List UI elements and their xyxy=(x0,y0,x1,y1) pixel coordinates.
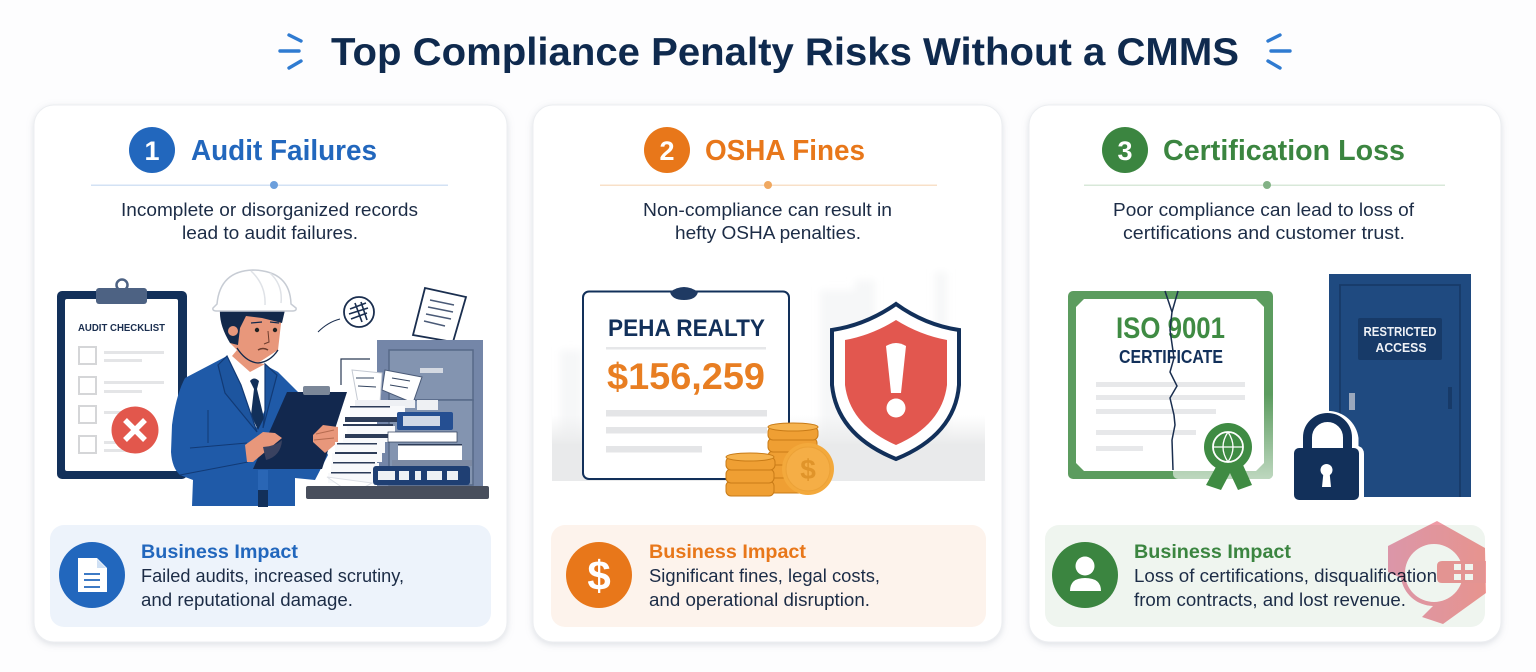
impact text 2 xyxy=(649,542,880,610)
description 3: certifications and customer trust. xyxy=(1123,222,1405,243)
impact text 3: Business Impact xyxy=(1134,542,1292,563)
number badge 2 xyxy=(644,127,690,173)
title text: Top Compliance Penalty Risks Without a CMMS xyxy=(331,31,1239,74)
impact text 3: from contracts, and lost revenue. xyxy=(1134,590,1406,610)
impact text 3: Loss of certifications, disqualification xyxy=(1134,566,1437,586)
impact text 1: Business Impact xyxy=(141,542,299,563)
description 2: hefty OSHA penalties. xyxy=(675,222,861,243)
padlock xyxy=(1292,411,1364,500)
panel: certification loss xyxy=(1029,105,1501,642)
impact text 3 xyxy=(1134,542,1437,610)
warning shield xyxy=(832,304,959,459)
impact text 2: Business Impact xyxy=(649,542,807,563)
gold coin stacks: $ xyxy=(800,454,816,485)
panel: audit failures xyxy=(34,105,507,642)
impact text 1: Failed audits, increased scrutiny, xyxy=(141,566,404,586)
description 3: Poor compliance can lead to loss of xyxy=(1113,199,1415,220)
number badge 1 xyxy=(129,127,175,173)
divider 3 xyxy=(1084,181,1445,189)
icon: person xyxy=(1052,542,1118,608)
watermark badge xyxy=(1388,521,1486,624)
cracked ISO certificate: CERTIFICATE xyxy=(1119,347,1223,367)
impact text 2: and operational disruption. xyxy=(649,590,870,610)
card background xyxy=(1029,105,1501,642)
icon: left sparkle xyxy=(280,35,301,68)
filing cabinet xyxy=(377,340,483,487)
restricted access door: ACCESS xyxy=(1376,341,1426,355)
divider 2 xyxy=(600,181,937,189)
pile of papers and binders xyxy=(327,359,472,494)
number badge 1: 1 xyxy=(144,136,160,166)
business impact box 3 xyxy=(1045,525,1485,627)
illustration: broken certificate and locked door xyxy=(1068,274,1471,500)
description 1: lead to audit failures. xyxy=(182,222,358,243)
icon: dollar xyxy=(566,542,632,608)
business impact box 1 xyxy=(50,525,491,627)
description 3 xyxy=(1113,199,1415,243)
penalty notice document: $156,259 xyxy=(607,356,765,397)
impact text 1: and reputational damage. xyxy=(141,590,353,610)
heading: audit failures: Audit Failures xyxy=(191,135,377,167)
restricted access door: RESTRICTED xyxy=(1364,325,1436,339)
icon: right sparkle xyxy=(1268,35,1290,68)
number badge 3: 3 xyxy=(1117,136,1133,166)
heading: certification loss: Certification Loss xyxy=(1163,135,1405,167)
description 1: Incomplete or disorganized records xyxy=(121,199,418,220)
number badge 3 xyxy=(1102,127,1148,173)
icon: red failure mark xyxy=(112,406,158,454)
title xyxy=(280,31,1290,74)
gold coin stacks xyxy=(726,423,834,496)
heading: OSHA fines: OSHA Fines xyxy=(705,135,865,167)
cracked ISO certificate: ISO 9001 xyxy=(1116,312,1225,345)
clipboard with audit checklist xyxy=(57,280,187,479)
penalty notice document xyxy=(583,287,789,479)
description 1 xyxy=(121,199,418,243)
clipboard with audit checklist: AUDIT CHECKLIST xyxy=(78,322,166,334)
inspector figure xyxy=(171,270,328,507)
card background xyxy=(34,105,507,642)
flying paper xyxy=(413,288,466,342)
number badge 2: 2 xyxy=(659,136,675,166)
inspector clipboard xyxy=(245,386,347,469)
divider 1 xyxy=(91,181,448,189)
description 2: Non-compliance can result in xyxy=(643,199,892,220)
icon: dollar: $ xyxy=(587,552,611,599)
description 2 xyxy=(643,199,892,243)
icon: document xyxy=(59,542,125,608)
cracked ISO certificate xyxy=(1068,291,1273,479)
penalty notice document: PEHA REALTY xyxy=(608,315,765,342)
card background xyxy=(533,105,1002,642)
green seal with ribbon xyxy=(1204,423,1252,490)
restricted access door xyxy=(1329,274,1471,497)
impact text 1 xyxy=(141,542,404,610)
panel: OSHA fines xyxy=(533,105,1002,642)
shelf xyxy=(306,486,489,499)
illustration: audit checklist and inspector xyxy=(57,270,489,507)
impact text 2: Significant fines, legal costs, xyxy=(649,566,880,586)
faded skyline backdrop xyxy=(552,272,985,481)
illustration: OSHA penalty notice xyxy=(552,272,985,496)
scribble thought bubble xyxy=(318,297,374,332)
business impact box 2 xyxy=(551,525,986,627)
